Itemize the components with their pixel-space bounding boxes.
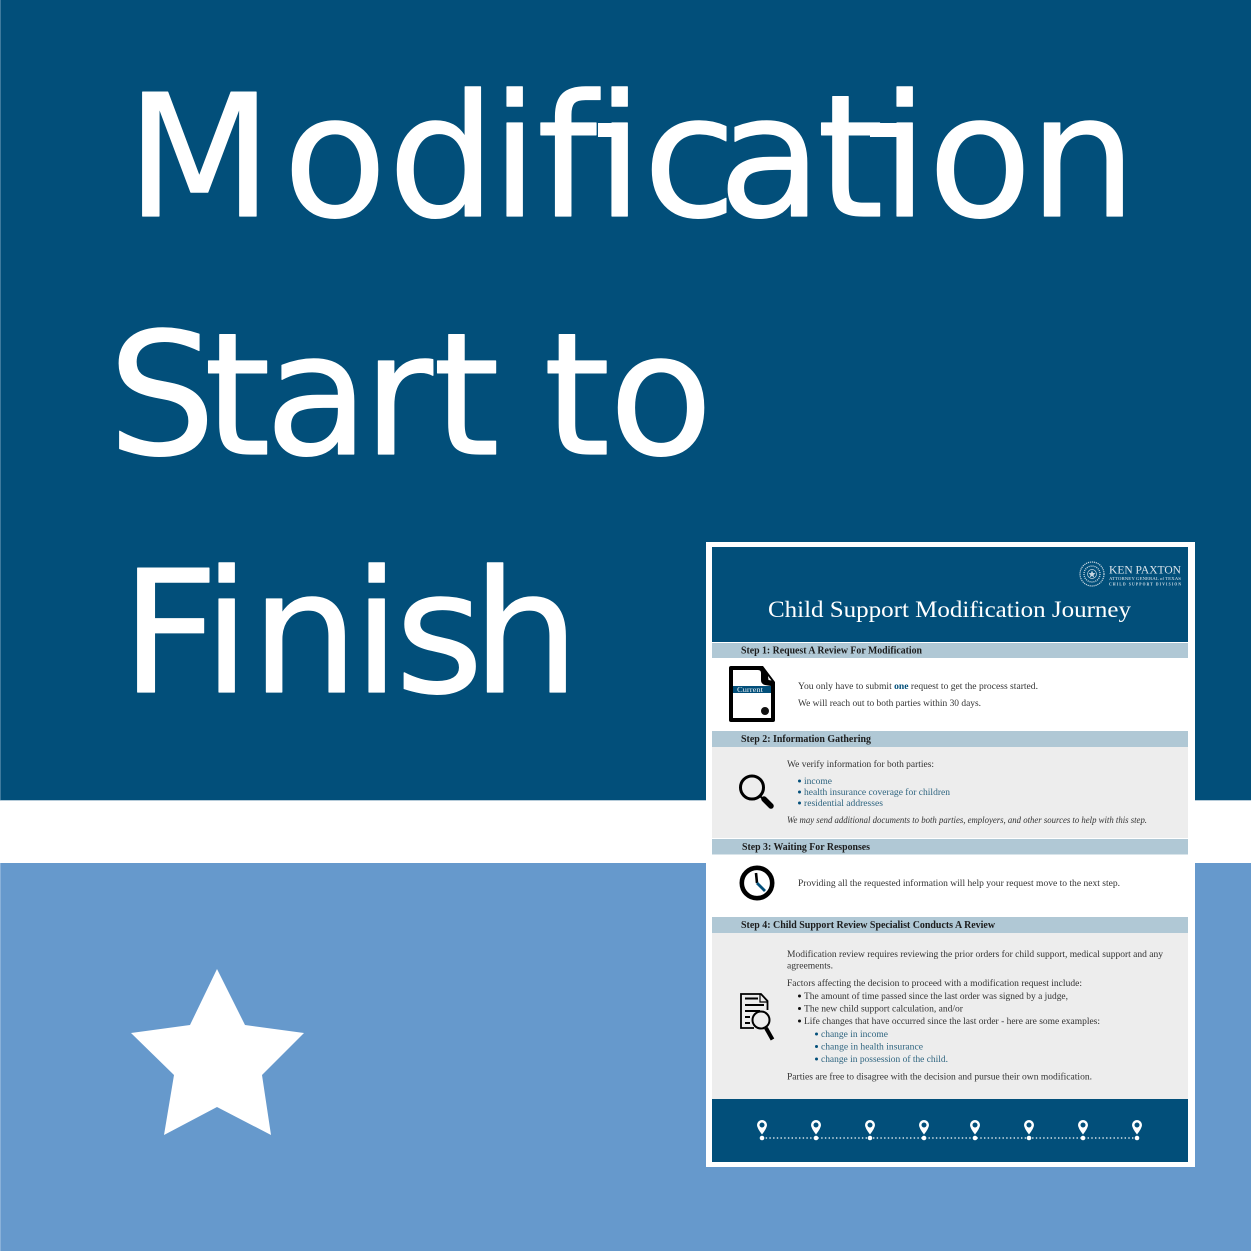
step 2 heading (712, 731, 1188, 747)
icon: star (131, 969, 304, 1135)
step 4 panel background (712, 933, 1188, 1099)
title: Start to (108, 297, 713, 495)
step 3 heading: Step 3: Waiting For Responses (742, 842, 870, 853)
document frame (706, 542, 1195, 1167)
step 4 text: change in income (821, 1029, 888, 1040)
icon: current document (729, 666, 775, 722)
step 2 text: We verify information for both parties: (787, 759, 934, 770)
step 3 text: Providing all the requested information will help your request move to the next step. (798, 878, 1120, 889)
step 4 text: change in health insurance (821, 1042, 923, 1052)
step 1 text: You only have to submit one request to get the process started. (798, 681, 1038, 692)
icon: document with magnifier (741, 994, 772, 1040)
step 2 text: We may send additional documents to both parties, employers, and other sources to help with this step. (787, 815, 1147, 826)
step 4 text: The new child support calculation, and/or (804, 1004, 964, 1014)
step 4 text: Factors affecting the decision to proceed with a modification request include: (787, 978, 1082, 989)
attorney general logotype: KEN PAXTON (1109, 564, 1182, 576)
step 2 text: health insurance coverage for children (804, 787, 950, 798)
step 2 text (787, 759, 1147, 826)
icon: current document: Current (737, 685, 764, 694)
timeline pins (757, 1120, 1142, 1140)
step 1 text: We will reach out to both parties within 30 days. (798, 698, 981, 709)
step 4 text (787, 949, 1163, 1082)
step 4 text: Parties are free to disagree with the decision and pursue their own modification. (787, 1072, 1092, 1082)
step 1 heading (712, 643, 1188, 658)
step 1 text (798, 681, 1038, 709)
attorney general logotype (1109, 564, 1182, 586)
step 4 text: Life changes that have occurred since the last order - here are some examples: (804, 1016, 1100, 1027)
background: dark blue band (0, 0, 1251, 800)
step 2 text: residential addresses (804, 798, 883, 809)
attorney general logotype: ATTORNEY GENERAL of TEXAS (1109, 576, 1181, 581)
attorney general logotype: CHILD SUPPORT DIVISION (1109, 582, 1181, 586)
step 3 heading (712, 839, 1188, 854)
icon: seal (1080, 562, 1104, 586)
step 2 panel background (712, 747, 1188, 838)
background: light blue band (0, 863, 1251, 1251)
title (108, 59, 1137, 733)
step 2 text: income (804, 776, 832, 787)
title: Modification (126, 59, 1137, 257)
step 4 heading: Step 4: Child Support Review Specialist Conducts A Review (741, 920, 996, 931)
step 4 text: Modification review requires reviewing the prior orders for child support, medical support and any (787, 949, 1163, 960)
icon: clock (742, 868, 772, 898)
step 4 text: The amount of time passed since the last order was signed by a judge, (804, 991, 1068, 1002)
step 4 text: agreements. (787, 960, 833, 972)
step 1 heading: Step 1: Request A Review For Modification (741, 646, 922, 656)
document header (712, 547, 1188, 642)
step 2 heading: Step 2: Information Gathering (741, 734, 871, 745)
icon: magnifier (740, 776, 771, 806)
title: Finish (121, 535, 580, 733)
panel: journey document preview (706, 542, 1195, 1167)
document title: Child Support Modification Journey (768, 597, 1132, 622)
footer band with timeline (712, 1099, 1188, 1162)
step 4 text: change in possession of the child. (821, 1054, 948, 1065)
step 4 heading (712, 917, 1188, 933)
